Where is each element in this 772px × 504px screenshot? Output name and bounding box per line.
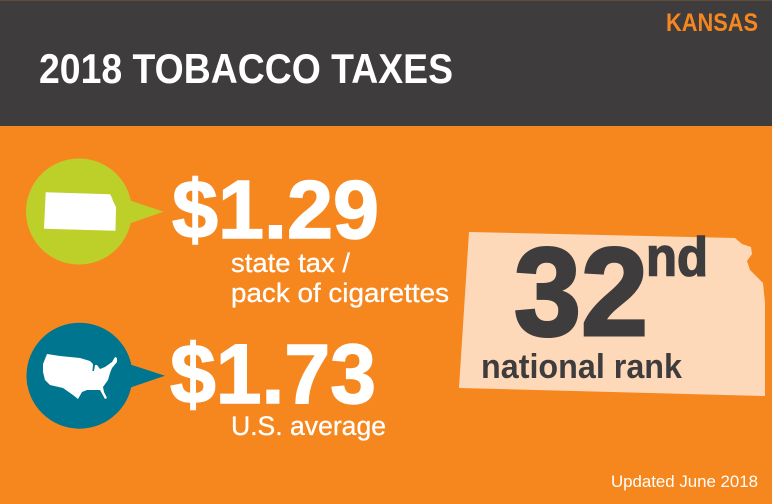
title: 2018 TOBACCO TAXES xyxy=(39,45,453,92)
state label: KANSAS xyxy=(666,9,758,37)
icon: Kansas speech bubble xyxy=(26,158,164,264)
state tax label: state tax / xyxy=(231,248,351,278)
header band xyxy=(0,0,772,126)
rank number: 32 xyxy=(514,223,648,362)
U.S. average amount: $1.73 xyxy=(170,327,376,421)
state tax amount: $1.29 xyxy=(172,163,379,256)
icon: U.S. speech bubble xyxy=(26,323,165,429)
rank caption: national rank xyxy=(481,348,682,386)
update note: Updated June 2018 xyxy=(611,472,758,491)
state tax label xyxy=(231,248,449,308)
Kansas rank panel xyxy=(459,223,765,396)
state tax label: pack of cigarettes xyxy=(231,278,449,308)
rank ordinal: nd xyxy=(646,226,708,288)
U.S. average label: U.S. average xyxy=(231,411,386,441)
